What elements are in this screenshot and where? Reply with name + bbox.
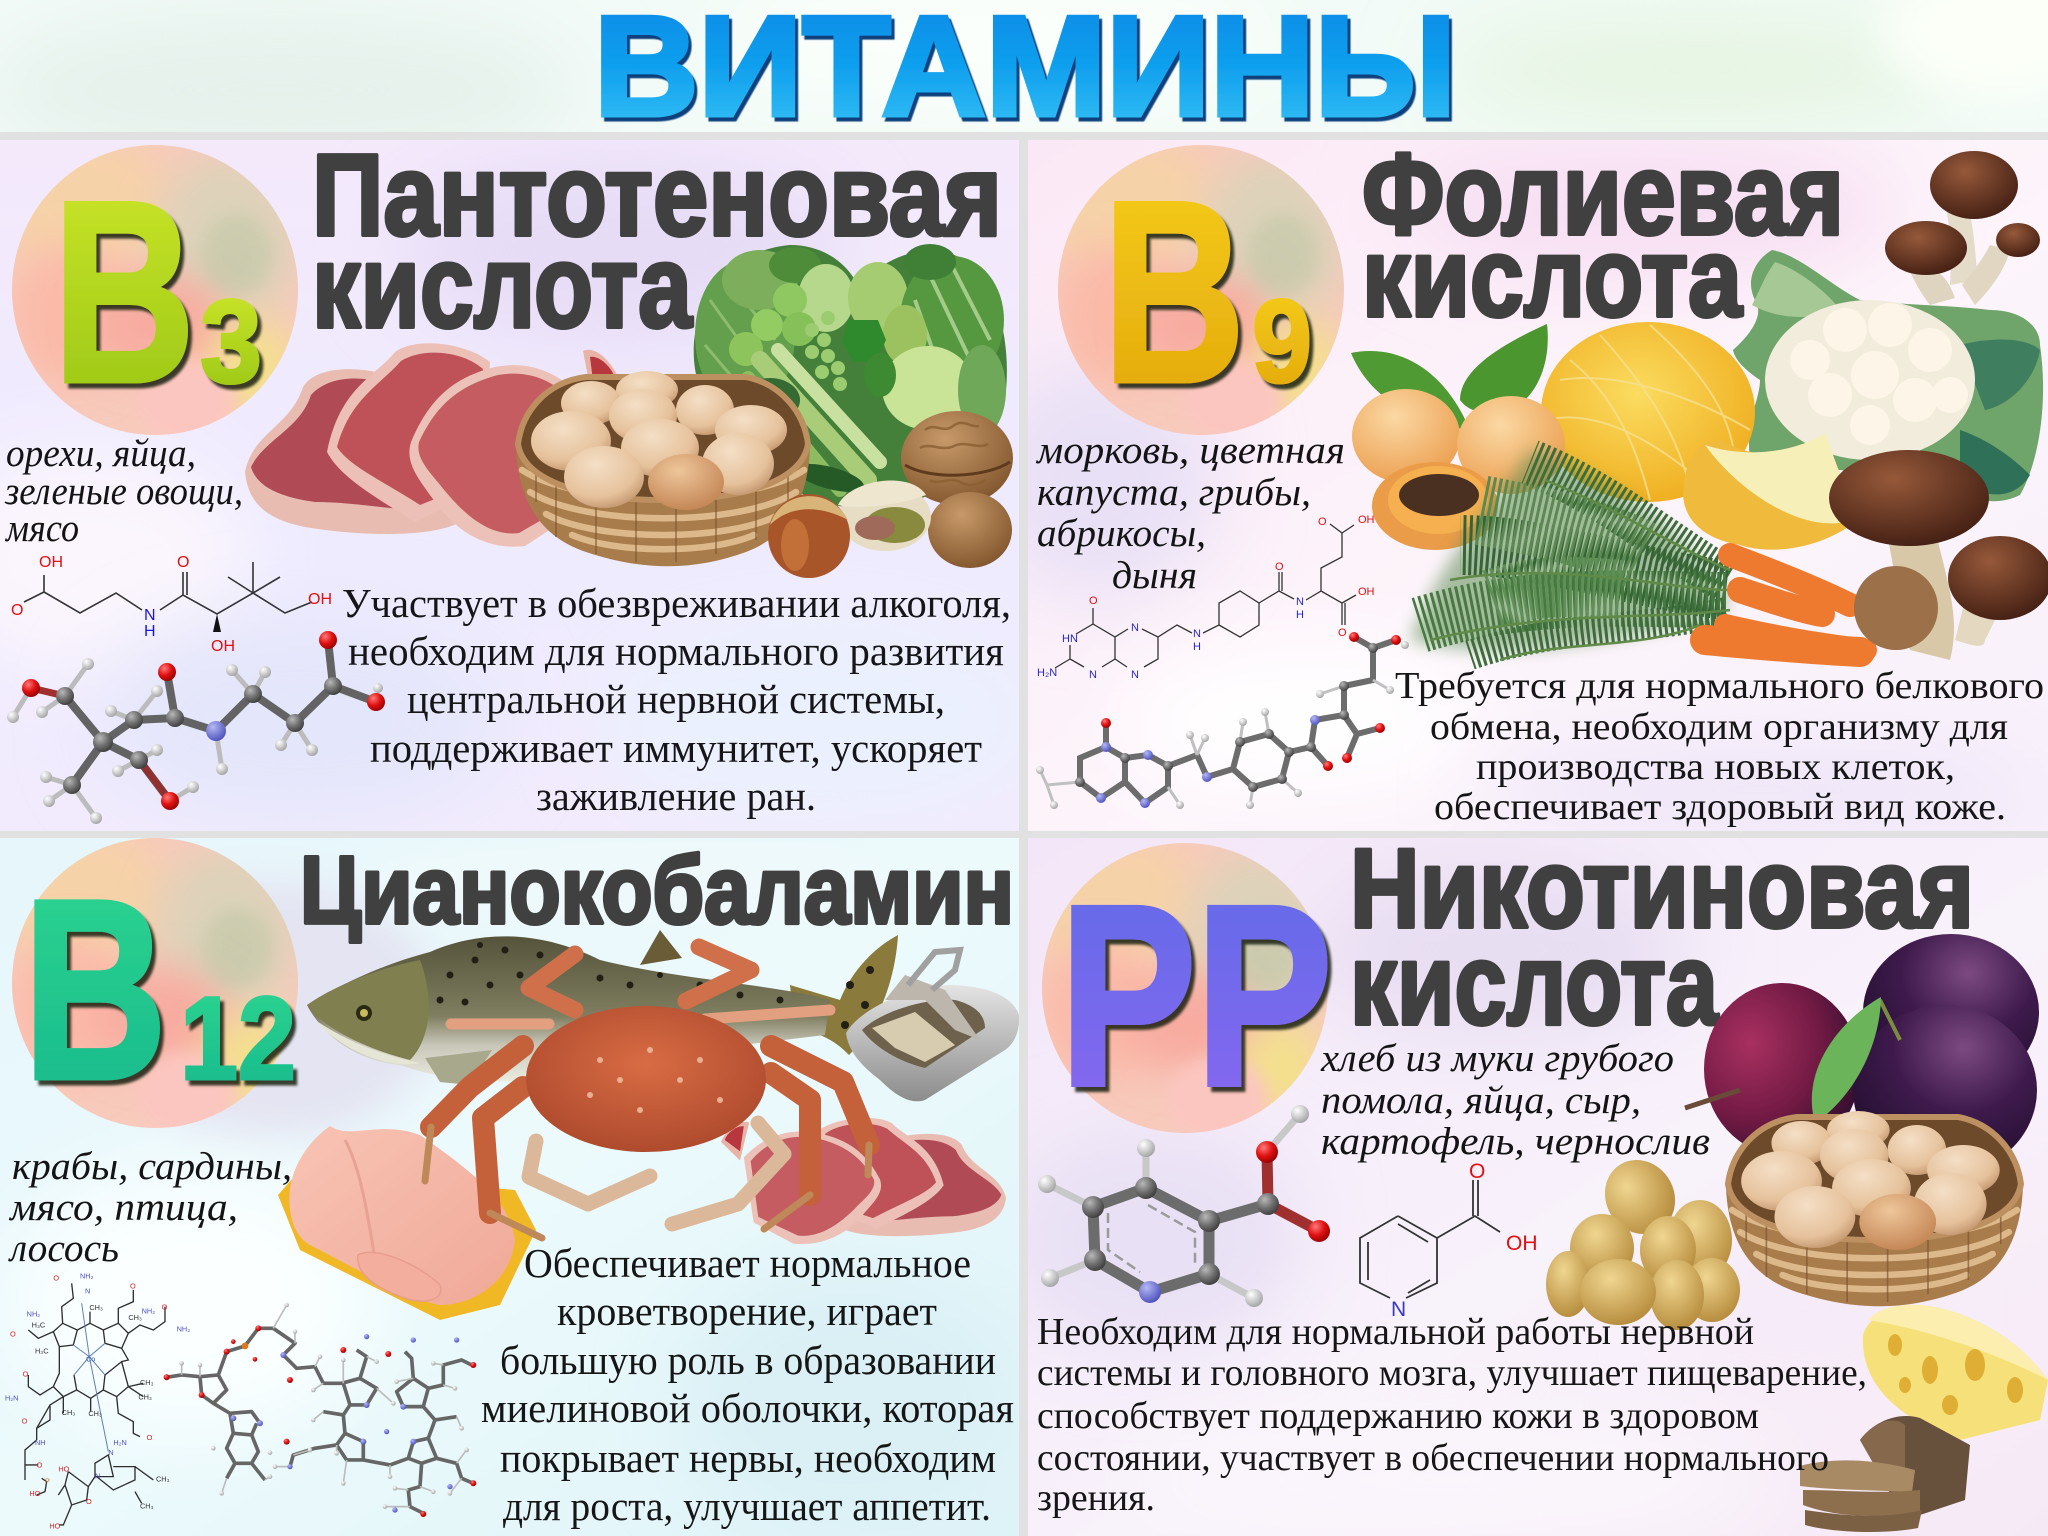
food sources text: лосось bbox=[8, 1227, 119, 1270]
structural formula: OH bbox=[211, 638, 235, 655]
structural formula: H bbox=[144, 623, 156, 640]
heading: кислота bbox=[1362, 215, 1743, 340]
food: egg basket bbox=[1726, 1111, 2023, 1306]
structural formula: O bbox=[1318, 516, 1327, 528]
structural formula: CH₃ bbox=[88, 1409, 102, 1418]
structural formula: O bbox=[10, 1330, 16, 1339]
food sources text: зеленые овощи, bbox=[4, 470, 243, 513]
food: melon bbox=[1541, 322, 1858, 550]
structural formula: OH bbox=[39, 554, 63, 571]
structural formula: H₂N bbox=[1037, 667, 1057, 679]
vitamin circle bbox=[1038, 135, 1344, 440]
structural formula: N bbox=[95, 1471, 100, 1480]
food: nuts bbox=[768, 411, 1013, 578]
description text: кроветворение, играет bbox=[557, 1288, 937, 1334]
structural formula: CH₃ bbox=[156, 1475, 170, 1484]
structural formula: O bbox=[1469, 1160, 1485, 1183]
description text bbox=[1037, 1311, 1867, 1519]
heading bbox=[1350, 826, 1974, 1049]
structural formula: NH₂ bbox=[142, 1306, 155, 1315]
description text: необходим для нормального развития bbox=[348, 628, 1004, 674]
structural formula: CH₃ bbox=[89, 1303, 103, 1312]
structural formula: O bbox=[23, 1370, 29, 1379]
food sources text: дыня bbox=[1112, 554, 1197, 597]
description text bbox=[342, 580, 1011, 819]
food: sardine can bbox=[846, 950, 1019, 1101]
food sources text: мясо, птица, bbox=[8, 1186, 238, 1229]
food: potatoes bbox=[1546, 1147, 1740, 1330]
heading: Цианокобаламин bbox=[300, 837, 1014, 944]
food sources text: картофель, чернослив bbox=[1321, 1120, 1710, 1163]
food: cheese bbox=[1863, 1305, 2048, 1440]
food sources text bbox=[4, 432, 243, 550]
structural formula bbox=[1037, 514, 1375, 681]
description text: для роста, улучшает аппетит. bbox=[503, 1483, 991, 1529]
structural formula: N bbox=[1089, 669, 1097, 681]
structural formula: O bbox=[130, 1281, 136, 1290]
description text: обмена, необходим организму для bbox=[1430, 706, 2008, 748]
structural formula: Co bbox=[86, 1355, 95, 1364]
structural formula: CH₃ bbox=[128, 1313, 142, 1322]
vitamin circle bbox=[0, 828, 298, 1133]
description text: Требуется для нормального белкового bbox=[1395, 665, 2044, 707]
food: egg basket bbox=[516, 371, 810, 566]
description text: обеспечивает здоровый вид коже. bbox=[1434, 786, 2006, 828]
vitamin letter B12: B bbox=[23, 847, 167, 1133]
food sources text bbox=[8, 1145, 292, 1270]
food sources text: орехи, яйца, bbox=[6, 432, 196, 475]
structural formula: N bbox=[1296, 596, 1304, 608]
structural formula: OH bbox=[1358, 514, 1375, 526]
food sources text: абрикосы, bbox=[1037, 512, 1206, 555]
structural formula: CH₃ bbox=[138, 1392, 152, 1401]
description text: состоянии, участвует в обеспечении нормального bbox=[1037, 1437, 1829, 1479]
food: bread bbox=[1800, 1416, 1970, 1532]
structural formula: CH₃ bbox=[62, 1408, 75, 1417]
description text: Необходим для нормальной работы нервной bbox=[1037, 1311, 1754, 1353]
ball-and-stick model bbox=[1036, 632, 1409, 809]
structural formula: O bbox=[147, 1433, 153, 1442]
heading: кислота bbox=[1350, 919, 1719, 1049]
food: large mushrooms bbox=[1829, 450, 2048, 660]
structural formula: H bbox=[1193, 641, 1201, 653]
structural formula: N bbox=[1193, 628, 1201, 640]
structural formula: O bbox=[177, 554, 189, 571]
structural formula bbox=[11, 554, 332, 655]
structural formula: N bbox=[1131, 669, 1139, 681]
structural formula: N bbox=[108, 1448, 114, 1457]
structural formula: N bbox=[1391, 1298, 1406, 1321]
structural formula: N bbox=[1131, 622, 1139, 634]
structural formula: H₂N bbox=[113, 1438, 127, 1447]
divider strip bbox=[0, 132, 2048, 140]
description text: способствует поддержанию кожи в здоровом bbox=[1037, 1395, 1759, 1437]
structural formula: CH₃ bbox=[140, 1501, 154, 1510]
vitamin letter B12: 12 bbox=[180, 973, 296, 1105]
ball-and-stick model bbox=[7, 631, 385, 824]
structural formula: HO bbox=[58, 1465, 70, 1474]
food: meat bbox=[721, 1118, 1006, 1244]
structural formula: N bbox=[85, 1286, 90, 1295]
structural formula: HN bbox=[1062, 633, 1078, 645]
structural formula: P bbox=[45, 1476, 50, 1485]
vitamin letter B12 bbox=[23, 847, 296, 1133]
structural formula: H₂N bbox=[5, 1394, 18, 1403]
heading: кислота bbox=[312, 221, 693, 353]
food sources text: крабы, сардины, bbox=[12, 1145, 292, 1188]
description text: покрывает нервы, необходим bbox=[500, 1435, 996, 1481]
vitamin circle bbox=[0, 135, 298, 440]
description text: Обеспечивает нормальное bbox=[524, 1240, 971, 1286]
structural formula bbox=[1360, 1160, 1538, 1321]
structural formula: O bbox=[86, 1497, 92, 1506]
structural formula: OH bbox=[1506, 1232, 1538, 1255]
food: meat steaks bbox=[245, 343, 620, 547]
structural formula: HO bbox=[49, 1521, 61, 1530]
structural formula: O bbox=[22, 1416, 28, 1425]
structural formula: H₃C bbox=[32, 1320, 46, 1329]
food: plums bbox=[1685, 934, 2039, 1175]
heading: Пантотеновая bbox=[312, 130, 1002, 260]
description text: центральной нервной системы, bbox=[407, 676, 945, 722]
food: carrots bbox=[1410, 450, 1866, 660]
heading bbox=[1362, 129, 1844, 340]
vitamin circle bbox=[1022, 833, 1328, 1138]
structural formula: H bbox=[1296, 609, 1304, 621]
food: salmon bbox=[307, 930, 898, 1085]
structural formula: NH bbox=[35, 1438, 46, 1447]
structural formula bbox=[5, 1271, 190, 1530]
description text bbox=[1395, 665, 2044, 828]
vitamin letter PP: PP bbox=[1060, 853, 1332, 1139]
food: cauliflower bbox=[1733, 250, 2043, 501]
food sources text: морковь, цветная bbox=[1035, 429, 1345, 472]
panel: B3 pantothenic acid bbox=[0, 130, 1040, 831]
description text bbox=[481, 1240, 1014, 1529]
structural formula: OH bbox=[308, 591, 332, 608]
structural formula: OH bbox=[1358, 586, 1375, 598]
description text: миелиновой оболочки, которая bbox=[481, 1385, 1014, 1431]
vitamin letter B3: B bbox=[53, 147, 195, 436]
structural formula: CH₃ bbox=[140, 1378, 154, 1387]
structural formula: O bbox=[1275, 561, 1284, 573]
structural formula: O bbox=[1338, 627, 1347, 639]
description text: заживление ран. bbox=[536, 773, 816, 819]
food sources text bbox=[1035, 429, 1345, 597]
structural formula: H₃C bbox=[35, 1346, 49, 1355]
description text: большую роль в образовании bbox=[500, 1337, 996, 1383]
panel: B12 cyanocobalamin bbox=[0, 828, 1020, 1536]
title band background bbox=[0, 0, 2048, 132]
structural formula: O bbox=[11, 602, 23, 619]
structural formula: O bbox=[37, 1460, 43, 1469]
description text: Участвует в обезвреживании алкоголя, bbox=[342, 580, 1011, 626]
food: greens bbox=[694, 244, 1007, 509]
heading bbox=[312, 130, 1002, 353]
vitamin letter B3: 3 bbox=[200, 276, 262, 408]
vitamin letter B9: B bbox=[1103, 147, 1245, 436]
description text: системы и головного мозга, улучшает пищеварение, bbox=[1037, 1352, 1867, 1394]
food sources text: хлеб из муки грубого bbox=[1320, 1037, 1674, 1080]
description text: производства новых клеток, bbox=[1476, 746, 1955, 788]
structural formula: O bbox=[53, 1274, 59, 1283]
heading: Фолиевая bbox=[1362, 129, 1844, 259]
food: small mushrooms bbox=[1885, 151, 2040, 305]
food sources text: мясо bbox=[4, 507, 79, 550]
ball-and-stick model bbox=[164, 1303, 476, 1517]
description text: зрения. bbox=[1037, 1477, 1155, 1519]
description text: поддерживает иммунитет, ускоряет bbox=[370, 725, 982, 771]
food sources text: помола, яйца, сыр, bbox=[1321, 1079, 1641, 1122]
food sources text: капуста, грибы, bbox=[1037, 471, 1311, 514]
food sources text bbox=[1320, 1037, 1710, 1163]
structural formula: O bbox=[1089, 595, 1098, 607]
food: chicken on tray bbox=[278, 1126, 536, 1320]
structural formula: HO bbox=[29, 1489, 41, 1498]
panel: PP nicotinic acid bbox=[1000, 826, 2048, 1536]
structural formula: O bbox=[162, 1302, 168, 1311]
vitamin letter B9: 9 bbox=[1252, 276, 1312, 408]
ball-and-stick model bbox=[1038, 1105, 1330, 1307]
panel: B9 folic acid bbox=[980, 129, 2048, 840]
structural formula: NH₂ bbox=[177, 1325, 190, 1334]
structural formula: N bbox=[144, 607, 156, 624]
food: apricots bbox=[1351, 324, 1565, 550]
structural formula: NH₂ bbox=[80, 1271, 94, 1280]
structural formula: NH₂ bbox=[27, 1310, 40, 1319]
food: crab bbox=[425, 947, 869, 1238]
